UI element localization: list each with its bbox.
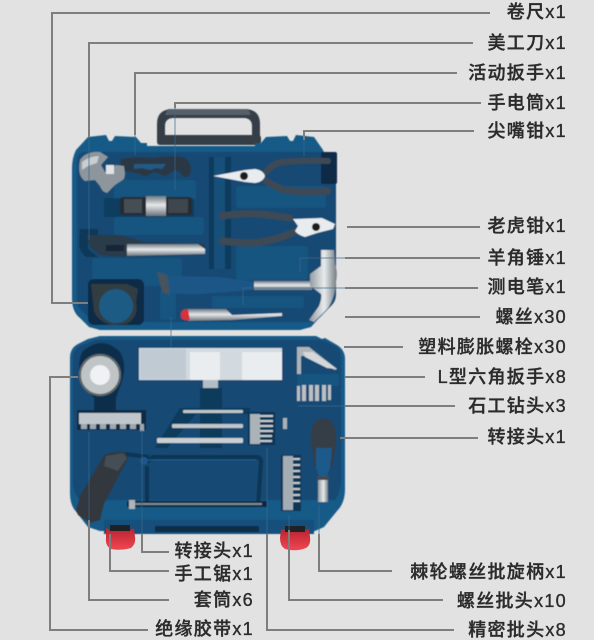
icon: combination pliers xyxy=(222,214,335,243)
plastic anchors box xyxy=(139,348,282,448)
callout: 美工刀: 美工刀x1 xyxy=(487,33,567,53)
icon: left red latch xyxy=(106,525,135,550)
callout: 羊角锤: 羊角锤x1 xyxy=(487,248,567,268)
callout: 套筒 xyxy=(89,432,254,610)
callout: 螺丝批头 xyxy=(289,515,567,611)
callout: 螺丝批头: 螺丝批头x10 xyxy=(457,591,567,611)
upper case recess xyxy=(77,152,336,322)
callout: 塑料膨胀螺栓: 塑料膨胀螺栓x30 xyxy=(418,337,567,357)
panel: lower case with accessories xyxy=(70,336,345,534)
callout: 老虎钳: 老虎钳x1 xyxy=(487,216,567,236)
icon: needle-nose pliers xyxy=(213,161,328,192)
callout: 手工锯: 手工锯x1 xyxy=(174,564,254,584)
tape roll xyxy=(79,343,124,412)
callout: 棘轮螺丝批旋柄 xyxy=(319,505,567,582)
callout: 尖嘴钳 xyxy=(304,121,567,156)
lower case shell xyxy=(70,336,345,531)
icon: right red latch xyxy=(280,526,310,550)
icon: hacksaw xyxy=(76,452,267,523)
callout: 卷尺: 卷尺x1 xyxy=(507,2,567,22)
icon: L hex keys xyxy=(297,347,339,401)
upper case shell xyxy=(72,135,327,330)
callout: 羊角锤 xyxy=(300,248,567,272)
centre channel xyxy=(209,157,231,269)
callout: 活动扳手: 活动扳手x1 xyxy=(468,63,567,83)
icon: claw hammer xyxy=(157,250,337,322)
callout: 活动扳手 xyxy=(135,63,567,155)
callout: 精密批头: 精密批头x8 xyxy=(468,620,567,640)
icon: utility knife xyxy=(87,235,205,257)
callout: 手电筒: 手电筒x1 xyxy=(487,93,567,113)
icon: masonry drill bits xyxy=(155,408,250,448)
callout: 转接头 right: 转接头x1 xyxy=(487,427,567,447)
callout: 手工锯 xyxy=(110,534,254,584)
callout: 绝缘胶带 xyxy=(50,377,254,639)
icon: voltage tester xyxy=(181,309,282,321)
callout: 尖嘴钳: 尖嘴钳x1 xyxy=(487,121,567,141)
bottom rim xyxy=(104,520,314,534)
callout: 棘轮螺丝批旋柄: 棘轮螺丝批旋柄x1 xyxy=(410,562,567,582)
raised foam blocks xyxy=(92,180,326,320)
callout: 石工钻头: 石工钻头x3 xyxy=(468,396,567,416)
callout: L型六角扳手: L型六角扳手x8 xyxy=(438,367,567,387)
icon: precision bits xyxy=(248,412,287,445)
callout: 手电筒 xyxy=(175,93,567,190)
lower case recess xyxy=(73,340,341,500)
callout: 测电笔: 测电笔x1 xyxy=(487,277,567,297)
callout: 套筒: 套筒x6 xyxy=(194,590,254,610)
callout: 转接头 bottom xyxy=(142,430,254,561)
icon: screw bit strip xyxy=(281,455,301,511)
icon: ratchet screwdriver xyxy=(311,418,336,502)
panel: upper case with hand tools xyxy=(72,135,337,330)
callout: 绝缘胶带: 绝缘胶带x1 xyxy=(155,619,254,639)
icon: flashlight xyxy=(120,196,192,216)
callout: 精密批头 xyxy=(267,448,567,640)
icon: tape measure xyxy=(91,284,138,325)
callout: 螺丝: 螺丝x30 xyxy=(495,307,567,327)
callout: 测电笔 xyxy=(243,277,567,305)
icon: adjustable wrench xyxy=(79,152,191,193)
dark pockets xyxy=(79,152,337,325)
callout: 美工刀 xyxy=(89,33,567,240)
callout: 转接头 bottom: 转接头x1 xyxy=(174,541,254,561)
carrying handle xyxy=(157,109,261,145)
icon: socket strip xyxy=(77,410,146,431)
